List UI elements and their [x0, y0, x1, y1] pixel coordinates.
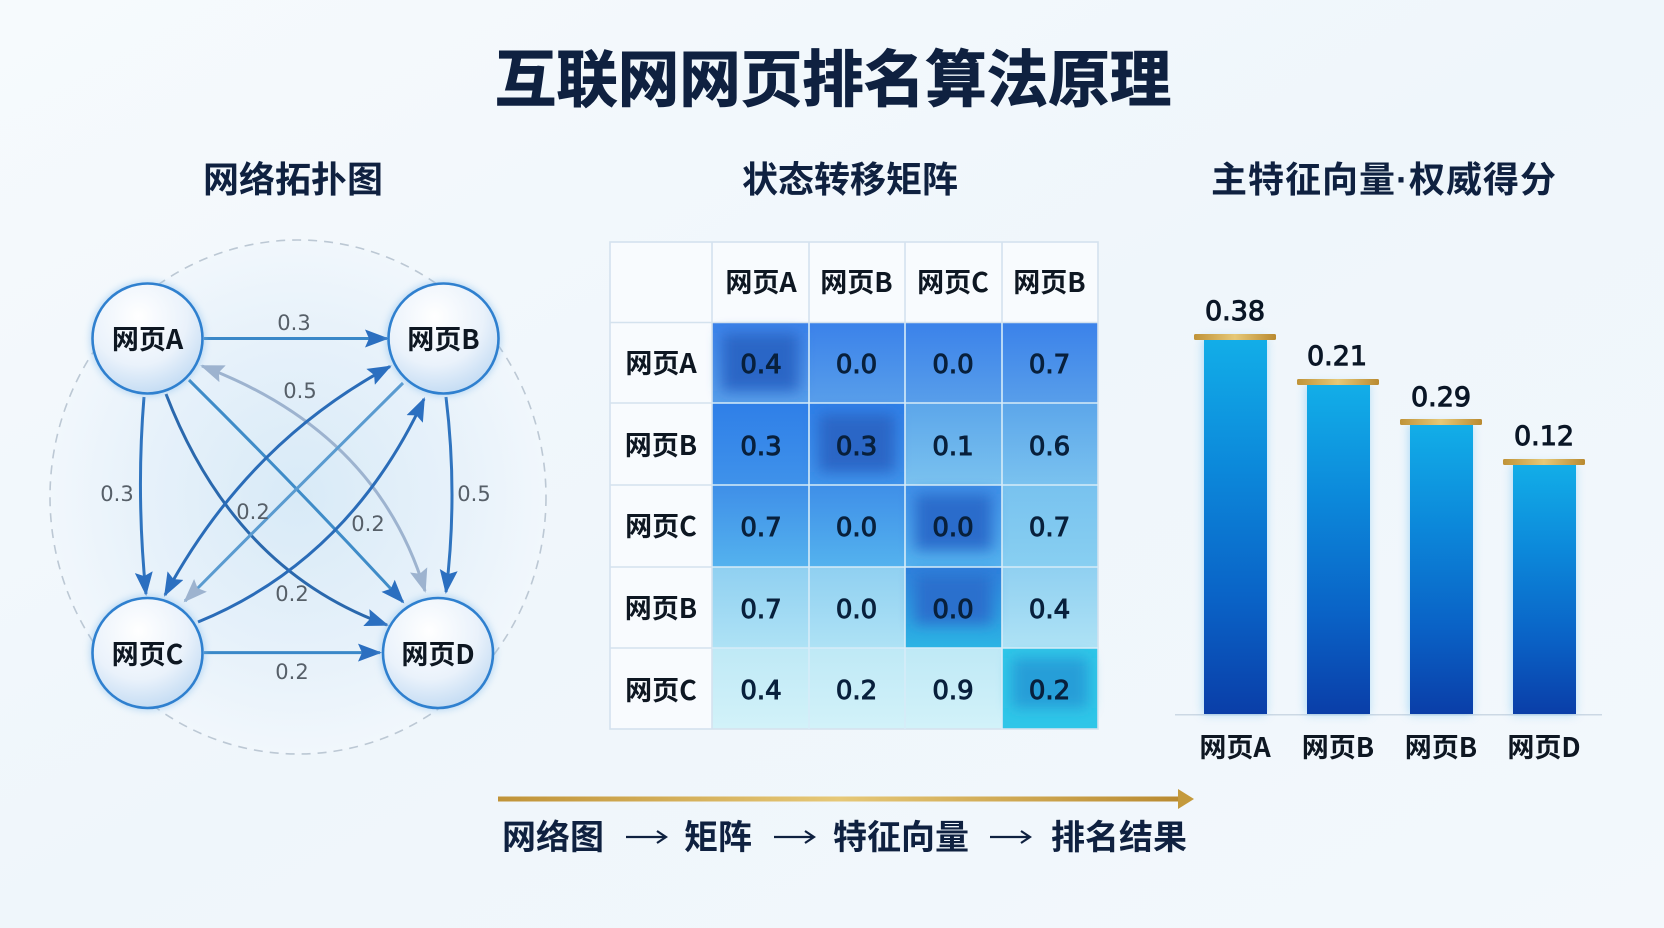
node A [90, 282, 204, 396]
edge weight labels: 0.2 [236, 500, 270, 524]
matrix values: 0.0 [836, 350, 877, 380]
matrix values: 0.2 [1029, 676, 1070, 706]
heading: network topology: 网络拓扑图 [203, 151, 383, 203]
bar: page D [1503, 421, 1585, 765]
process flow text: 特征向量 [833, 810, 969, 859]
process flow text: 矩阵 [684, 810, 752, 859]
matrix values: 0.7 [740, 513, 782, 543]
column headers [725, 261, 1086, 300]
dark heat highlights [722, 333, 1088, 708]
matrix values: 0.3 [740, 432, 782, 462]
column headers: 网页B [1013, 261, 1086, 300]
bar: page A [1194, 296, 1276, 765]
matrix values: 0.7 [1029, 350, 1070, 380]
edge weight labels [100, 311, 491, 684]
matrix values: 0.0 [836, 513, 877, 543]
matrix values: 0.4 [740, 350, 782, 380]
matrix values: 0.4 [1029, 595, 1070, 625]
matrix values: 0.1 [932, 432, 974, 462]
matrix values: 0.9 [932, 676, 974, 706]
bar: page B [1297, 341, 1379, 765]
bar: page B: 0.21 [1307, 341, 1367, 372]
matrix background [610, 242, 1098, 729]
bar: page B second: 0.29 [1411, 382, 1471, 413]
title: 互联网网页排名算法原理 [495, 30, 1171, 119]
node D [381, 596, 495, 710]
node C: 网页C [112, 633, 183, 672]
node B: 网页B [407, 318, 480, 357]
arrow: gold process arrow [498, 789, 1194, 809]
bar: page A: 网页A [1199, 726, 1271, 765]
row headers: 网页B [625, 587, 697, 626]
bar: page B: 网页B [1302, 726, 1374, 765]
row headers [625, 342, 697, 708]
row headers: 网页B [625, 424, 697, 463]
bar: page D: 网页D [1507, 726, 1581, 765]
row headers: 网页A [625, 342, 697, 381]
column headers: 网页B [820, 261, 893, 300]
matrix values [740, 350, 1070, 706]
row headers: 网页C [625, 669, 697, 708]
grid lines [610, 242, 1098, 729]
process flow text [502, 810, 1187, 859]
heading: transition matrix: 状态转移矩阵 [742, 151, 958, 203]
node B [386, 282, 500, 396]
edge weight labels: 0.2 [275, 660, 309, 684]
flow arrows [626, 831, 1030, 843]
bar: page B second [1400, 382, 1482, 765]
matrix values: 0.0 [932, 350, 974, 380]
edge weight labels: 0.5 [457, 482, 491, 506]
axis baseline [1175, 714, 1602, 716]
bar: page D: 0.12 [1514, 421, 1574, 452]
edge weight labels: 0.3 [277, 311, 311, 335]
matrix values: 0.0 [932, 595, 974, 625]
process flow text: 网络图 [502, 810, 604, 859]
bar: page A: 0.38 [1205, 296, 1265, 327]
edge arrows [140, 338, 452, 653]
matrix values: 0.7 [1029, 513, 1070, 543]
panel: bar chart [1175, 296, 1602, 765]
dashed boundary circle [50, 240, 546, 754]
row headers: 网页C [625, 505, 697, 544]
edge weight labels: 0.2 [351, 512, 385, 536]
matrix values: 0.4 [740, 676, 782, 706]
node A: 网页A [112, 318, 184, 357]
edge weight labels: 0.2 [275, 582, 309, 606]
process flow text: 排名结果 [1051, 810, 1187, 859]
heading: principal eigenvector: 主特征向量·权威得分 [1211, 151, 1557, 203]
bar: page B second: 网页B [1405, 726, 1477, 765]
matrix values: 0.3 [836, 432, 877, 462]
matrix values: 0.2 [836, 676, 877, 706]
matrix values: 0.0 [932, 513, 974, 543]
matrix values: 0.7 [740, 595, 782, 625]
node C [90, 596, 204, 710]
node D: 网页D [401, 633, 475, 672]
column headers: 网页C [917, 261, 989, 300]
edge weight labels: 0.5 [283, 379, 317, 403]
panel: transition matrix [610, 242, 1098, 729]
column headers: 网页A [725, 261, 797, 300]
matrix values: 0.6 [1029, 432, 1070, 462]
panel: network graph [50, 240, 546, 754]
edge weight labels: 0.3 [100, 482, 134, 506]
matrix values: 0.0 [836, 595, 877, 625]
heat cells [712, 323, 1098, 729]
